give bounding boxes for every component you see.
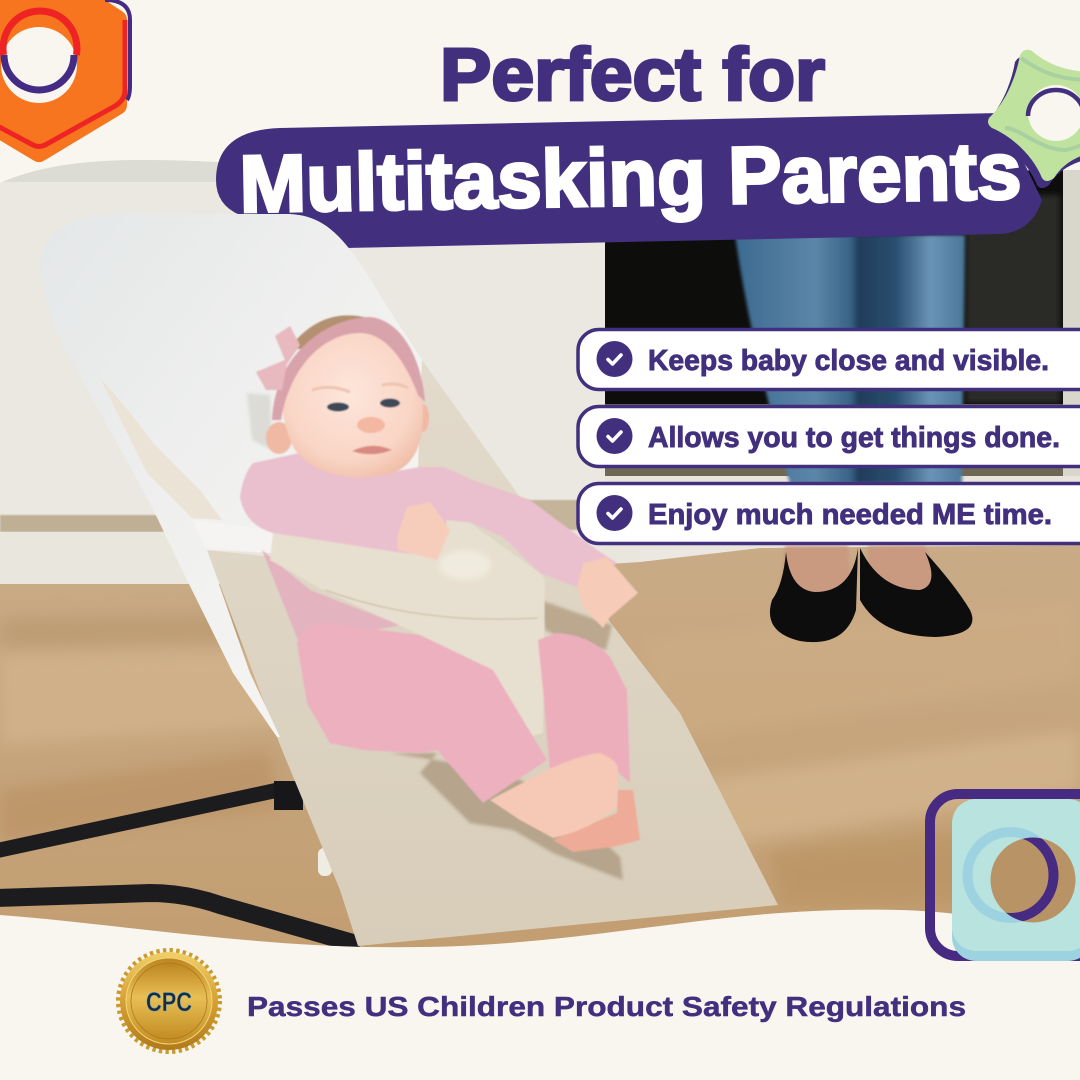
decorative shape: teal square [930, 794, 1080, 961]
teal lower strip [952, 820, 1080, 961]
purple outline [930, 794, 1080, 956]
green star [988, 50, 1080, 181]
benefit text: Allows you to get things done. [648, 422, 1060, 454]
mouth [352, 446, 392, 454]
head [282, 332, 423, 478]
bouncer frame rails [0, 781, 360, 945]
parent's jeans [735, 235, 965, 484]
hole showing floor [990, 838, 1076, 922]
bib seam [325, 590, 538, 619]
purple offset shadow [983, 57, 1080, 188]
headband [272, 317, 425, 420]
ear right [417, 404, 429, 432]
CPC seal [119, 951, 219, 1051]
seal inner ring [131, 963, 207, 1039]
floor light bands [0, 600, 1080, 905]
foot right [553, 790, 640, 852]
hole [1, 27, 77, 103]
check icon [596, 418, 632, 454]
purple ring arc [1028, 90, 1080, 116]
hair [288, 315, 368, 350]
seat mesh [40, 214, 422, 737]
baby [240, 315, 640, 852]
hole [1028, 85, 1080, 141]
ear left [266, 422, 292, 454]
lower rail [0, 893, 360, 945]
blue ring [968, 832, 1054, 918]
seal inner disc [126, 958, 212, 1044]
pants: right leg [538, 633, 630, 783]
bouncer seat [40, 214, 778, 946]
decorative shape: orange hexagon [0, 0, 130, 152]
purple outline [105, 0, 130, 100]
seal body [120, 952, 218, 1050]
benefit text: Keeps baby close and visible. [648, 345, 1049, 377]
orange hexagon fill [0, 0, 117, 152]
seat foot [318, 848, 332, 876]
lower torso [262, 550, 400, 645]
purple ring [4, 55, 74, 90]
bib [270, 520, 545, 737]
benefit: keeps baby close [578, 330, 1080, 390]
white base board [0, 532, 164, 533]
pill [578, 484, 1080, 544]
rail joint [274, 781, 303, 810]
bib logo [439, 550, 491, 580]
hand right [577, 557, 638, 628]
cabinet plinth strip [0, 514, 164, 532]
banner text: Multitasking Parents [239, 126, 1022, 230]
purple crescent [1006, 838, 1058, 922]
torso and arms [240, 453, 617, 587]
title: Perfect for: Perfect for [440, 33, 825, 116]
shoe right [860, 548, 972, 637]
check icon [596, 495, 632, 531]
wall and cabinets [0, 182, 740, 562]
pill [578, 330, 1080, 390]
upper rail [0, 790, 278, 851]
upper cabinet band [2, 160, 218, 182]
footer statement: Passes US Children Product Safety Regulations [247, 991, 966, 1022]
decorative shape: green star [983, 50, 1080, 188]
benefit: me time [578, 484, 1080, 544]
seat shadow under feet [390, 753, 623, 880]
banner shape [216, 113, 1042, 248]
white strap [193, 520, 275, 553]
hand left [397, 502, 450, 560]
nose [357, 417, 385, 433]
floor [0, 545, 1080, 965]
foot left [490, 753, 618, 838]
benefit text: Enjoy much needed ME time. [648, 499, 1052, 531]
head shadow on mesh [247, 393, 272, 450]
benefit: get things done [578, 406, 1080, 466]
red outline [0, 20, 125, 146]
beige fabric through the mesh [100, 378, 222, 520]
oven [605, 170, 1063, 406]
pants: left leg [297, 623, 547, 803]
seat beige fabric [207, 360, 778, 946]
headband bow [256, 326, 300, 390]
photo: kitchen background with parent standing [0, 150, 1080, 965]
eyes [327, 398, 400, 412]
banner: Multitasking Parents [216, 113, 1042, 248]
parent's feet [782, 545, 932, 592]
shoe left [770, 548, 858, 642]
lower oven strip [605, 404, 1063, 478]
seal teeth [119, 951, 219, 1051]
white base right [605, 476, 1080, 482]
seal label: CPC [146, 987, 192, 1017]
oven window right [966, 195, 1060, 403]
red ring [3, 11, 77, 55]
teal square [952, 799, 1080, 951]
plinth strip right of seat [528, 499, 578, 531]
shaded fabric by hand [540, 600, 612, 650]
eyebrows [312, 384, 408, 392]
right wall edge [1063, 170, 1080, 476]
pill [578, 406, 1080, 466]
check icon [596, 341, 632, 377]
star inner line [1005, 58, 1080, 150]
